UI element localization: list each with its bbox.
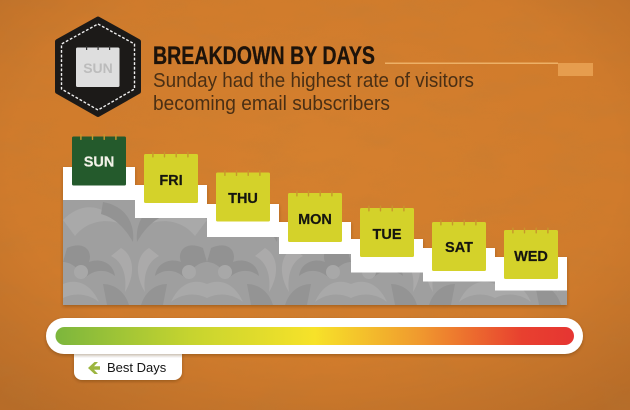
calendar: THU: THU: [228, 191, 258, 207]
subtitle: [153, 70, 474, 115]
calendar: SAT: [432, 220, 486, 271]
subtitle: becoming email subscribers: [153, 93, 390, 115]
chart base shadow: [63, 167, 567, 305]
patterned step columns: [63, 200, 567, 305]
calendar: THU: [216, 170, 270, 222]
calendar: WED: [504, 228, 558, 279]
calendar: SUN: SUN: [84, 154, 114, 170]
legend label: Best Days: [107, 360, 167, 375]
calendar: MON: [288, 190, 342, 242]
title: BREAKDOWN BY DAYS: [153, 42, 375, 70]
legend tab: best days: [74, 346, 182, 380]
calendar: TUE: [360, 206, 414, 257]
calendar: MON: MON: [298, 212, 332, 228]
calendar: TUE: TUE: [372, 227, 402, 243]
icon: left arrow: [88, 362, 100, 374]
icon: hexagon badge with calendar: [58, 19, 138, 114]
color scale bar: [46, 318, 583, 354]
icon: hexagon badge with calendar: SUN: [83, 60, 113, 76]
calendar: SUN: [72, 134, 126, 186]
subtitle: Sunday had the highest rate of visitors: [153, 70, 474, 92]
calendar: SAT: SAT: [445, 240, 473, 256]
stepped bar chart by day: [63, 134, 567, 305]
calendar: FRI: [144, 152, 198, 203]
calendar: FRI: FRI: [159, 173, 183, 189]
decorative header rule with tab: [385, 62, 593, 76]
calendar: WED: WED: [514, 249, 548, 265]
